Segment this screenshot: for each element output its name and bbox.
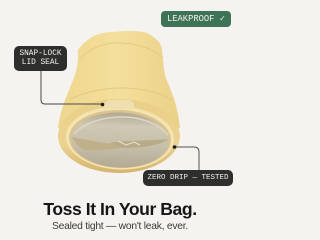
badge: leakproof: LEAKPROOF ✓: [167, 14, 225, 24]
label: snap-lock lid seal: [14, 46, 67, 71]
label: zero drip tested: ZERO DRIP — TESTED: [147, 174, 228, 182]
snap-lock tab: [104, 100, 134, 109]
callout line: lid seal: [41, 71, 104, 106]
label: snap-lock lid seal: LID SEAL: [22, 58, 59, 66]
badge: leakproof: [161, 11, 231, 27]
label: zero drip tested: [143, 170, 233, 186]
subtitle: Sealed tight — won't leak, ever.: [52, 221, 188, 232]
lid glass interior: [70, 111, 170, 169]
bottle illustration with callout lines: [40, 31, 200, 173]
bottle body: [58, 31, 180, 128]
callout line: zero drip: [173, 145, 199, 171]
label: snap-lock lid seal: SNAP-LOCK: [19, 50, 62, 58]
lid rim: [58, 99, 180, 173]
title: Toss It In Your Bag.: [43, 199, 197, 219]
